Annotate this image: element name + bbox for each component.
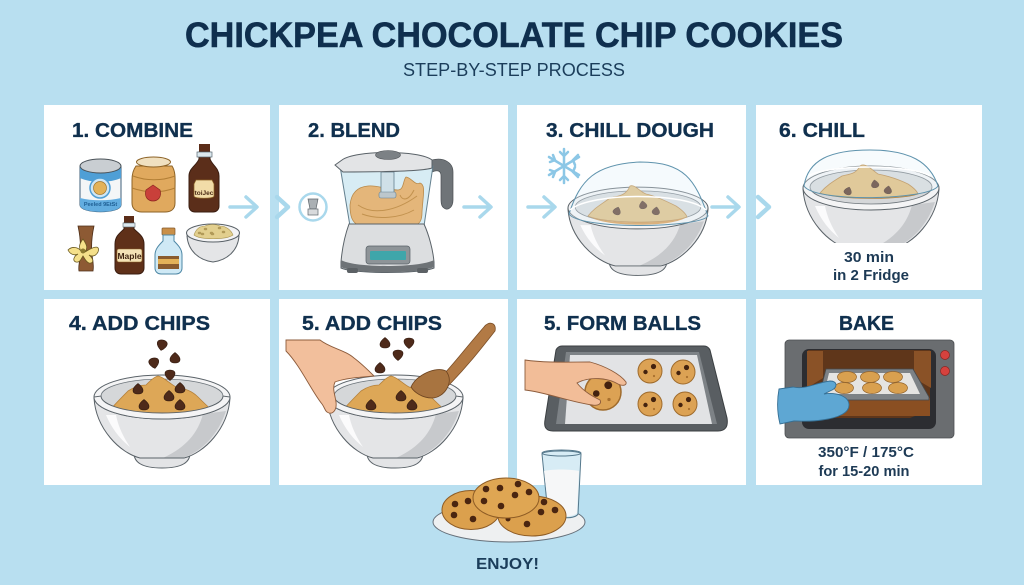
dough: [588, 186, 687, 222]
heading: 4. add chips: 4. ADD CHIPS: [69, 312, 210, 335]
icon: chickpea can: Peeled 9EtSt: [84, 202, 117, 208]
food processor: [335, 150, 453, 273]
icon: chickpea can: [80, 159, 121, 212]
icon: bowl of chickpeas: [186, 224, 240, 262]
arrow: [712, 197, 739, 217]
base: [341, 224, 434, 272]
note: fridge time: [833, 249, 909, 284]
blade shaft: [381, 172, 394, 197]
icon: snowflake: [549, 149, 579, 183]
chevron between step 1 and 2: [277, 197, 288, 217]
lid: [335, 152, 432, 172]
panel: step 5 add chips: [279, 299, 508, 485]
oven mitt: [778, 381, 849, 424]
panel: step 6 chill: [756, 105, 982, 290]
bowl with dough: [327, 323, 495, 468]
enjoy label: ENJOY!: [476, 556, 539, 573]
icon: syrup bottle: [189, 144, 219, 212]
note: temperature and time: [818, 444, 914, 480]
heading: 3. chill dough: 3. CHILL DOUGH: [546, 119, 714, 142]
oven: [778, 340, 954, 438]
panel: step 4 add chips: [44, 299, 270, 485]
arrow: [230, 197, 257, 217]
title: CHICKPEA CHOCOLATE CHIP COOKIES: [185, 16, 843, 55]
tray of cookies: [819, 369, 929, 400]
hand: [286, 340, 374, 413]
heading: 6. chill: 6. CHILL: [779, 119, 865, 142]
bowl with cling film: [568, 162, 708, 275]
cookie right: [498, 496, 566, 536]
note: fridge time: in 2 Fridge: [833, 267, 909, 284]
baking tray: [545, 346, 727, 431]
plate: [433, 502, 585, 542]
heading: 5. add chips: 5. ADD CHIPS: [302, 312, 442, 335]
icon: peanut butter jar: [132, 157, 175, 212]
icon: small extract bottle: [155, 228, 182, 274]
bowl with cling film: [800, 150, 950, 278]
subtitle: STEP-BY-STEP PROCESS: [403, 60, 625, 80]
panel: step 1 combine: [44, 105, 270, 290]
panel: step 3 chill dough: [517, 105, 746, 290]
arrow: [464, 197, 491, 217]
glass of milk: [542, 450, 581, 518]
chevron between step 3 and 6: [758, 197, 769, 217]
enjoy: plate of cookies and milk: [433, 450, 585, 542]
hand: [525, 360, 626, 405]
note: temperature and time: 350°F / 175°C: [818, 444, 914, 461]
wooden spoon: [411, 323, 495, 398]
panel: step 2 blend: [279, 105, 508, 290]
bowl with dough and chips: [94, 339, 230, 468]
note: temperature and time: for 15-20 min: [818, 463, 910, 480]
processed dough: [350, 177, 424, 229]
cookie top: [473, 478, 539, 518]
handle: [432, 159, 453, 209]
note: fridge time: 30 min: [844, 249, 894, 266]
heading: 1. combine: 1. COMBINE: [72, 119, 193, 142]
arrow: [528, 197, 555, 217]
cookie left: [442, 490, 500, 530]
jar: [340, 166, 433, 226]
panel: step 5 form balls: [517, 299, 746, 485]
heading: 2. blend: 2. BLEND: [308, 119, 400, 142]
heading: 5. form balls: 5. FORM BALLS: [544, 312, 701, 335]
icon: blender circle: [300, 194, 326, 220]
icon: syrup bottle: toiJec: [195, 190, 214, 197]
icon: vanilla flower: [68, 226, 98, 271]
heading: bake: BAKE: [839, 312, 894, 335]
icon: maple syrup bottle: Maple: [117, 251, 142, 261]
panel: bake: [756, 299, 982, 485]
icon: maple syrup bottle: [115, 216, 144, 274]
oven knobs: [940, 350, 950, 376]
